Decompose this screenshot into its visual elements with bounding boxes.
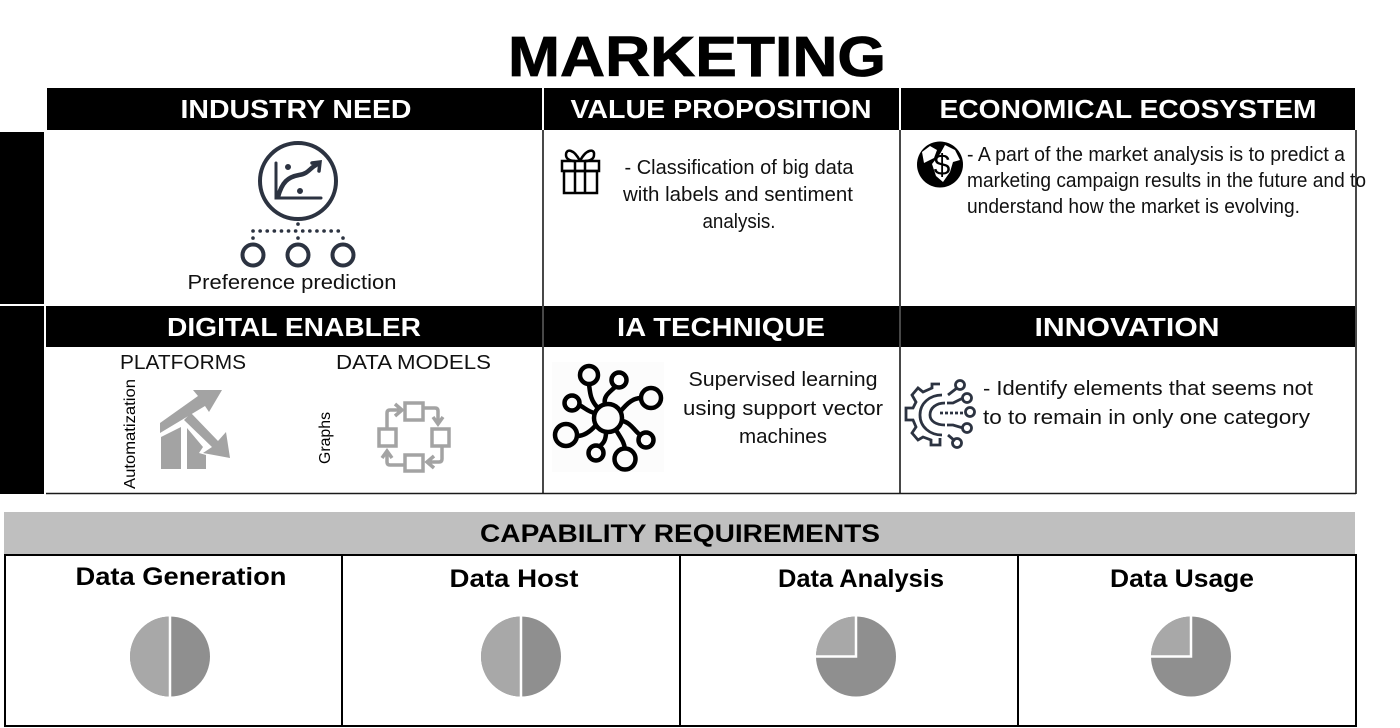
heading: IA technique [544,306,899,347]
panel: innovation [906,377,1313,448]
title: MARKETING [508,25,886,89]
panel: capability frame [5,555,1356,726]
text: data analysis: Data Analysis [778,565,944,593]
icon: globe with dollar: $ [934,149,951,182]
icon: gear circuit [906,380,974,448]
panel: industry need [188,143,396,294]
icon: automation arrows [160,390,230,469]
pie chart: half [130,615,210,698]
pie chart: three quarters [1150,615,1231,696]
text: automatization: Automatization [122,379,139,489]
text: data host: Data Host [450,565,579,593]
panel: IA technique [552,362,883,472]
text: data usage: Data Usage [1110,565,1254,593]
text: economical ecosystem [967,143,1366,218]
text: economical ecosystem: understand how the market is evolving. [967,195,1300,218]
panel: digital enabler [120,351,491,489]
heading: industry need: INDUSTRY NEED [180,94,412,124]
heading: innovation: INNOVATION [1034,312,1220,342]
text: supervised learning: machines [739,425,827,448]
text: economical ecosystem: marketing campaign results in the future and to [967,169,1366,192]
icon: gift [562,151,599,193]
text: platforms: PLATFORMS [120,351,246,374]
panel: value proposition [562,151,854,233]
heading: innovation [901,306,1355,347]
text: value proposition: analysis. [702,210,776,233]
text: supervised learning: using support vector [683,397,883,420]
pie chart: three quarters [815,615,896,696]
panel: data analysis [778,565,944,696]
heading: industry need [47,88,542,130]
text: preference prediction: Preference prediction [188,271,396,294]
heading: IA technique: IA TECHNIQUE [617,312,825,342]
text: supervised learning: Supervised learning [688,368,878,391]
panel: data host [450,565,579,698]
pie chart: half [481,615,561,698]
text: value proposition [622,156,854,233]
panel: economical ecosystem [917,142,1366,218]
icon: preference prediction [242,143,354,266]
text: supervised learning [683,368,883,448]
text: innovation: - Identify elements that seems not [983,377,1313,400]
panel: top row side bar [0,132,44,304]
panel: data generation [76,563,286,698]
heading: economical ecosystem [901,88,1355,130]
panel: bottom row side bar [0,306,44,494]
text: innovation: to to remain in only one category [983,406,1311,429]
panel: data usage [1110,565,1254,696]
text: data generation: Data Generation [76,563,286,591]
icon: globe with dollar [917,142,963,188]
text: economical ecosystem: - A part of the market analysis is to predict a [967,143,1346,166]
text: innovation [983,377,1313,429]
heading: digital enabler: DIGITAL ENABLER [167,312,421,342]
text: graphs: Graphs [317,412,334,464]
icon: radial network [555,366,661,470]
heading: value proposition: VALUE PROPOSITION [570,94,872,124]
text: value proposition: - Classification of big data [624,156,854,179]
heading: economical ecosystem: ECONOMICAL ECOSYSTEM [940,94,1316,124]
heading: value proposition [544,88,899,130]
heading: capability requirements: CAPABILITY REQUIREMENTS [480,520,880,548]
heading: digital enabler [46,306,542,347]
icon: graph cycle [379,403,449,471]
heading: capability requirements [4,512,1355,554]
text: data models: DATA MODELS [336,351,491,374]
text: value proposition: with labels and sentiment [622,183,853,206]
